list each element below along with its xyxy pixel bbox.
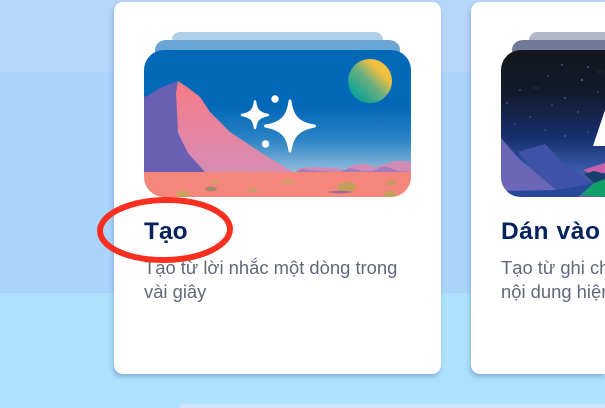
icon: white letter fragment — [593, 110, 605, 146]
heading: Dán vào: Dán vào — [501, 218, 601, 244]
bottom panel edge — [180, 404, 605, 408]
text: create description — [144, 257, 397, 302]
icon: stacked illustration of desert landscape with sparkles — [144, 32, 411, 197]
panel: create card — [114, 2, 441, 374]
text: create description: Tạo từ lời nhắc một dòng trong — [144, 257, 397, 278]
text: paste description — [501, 257, 605, 302]
panel: paste card — [471, 2, 605, 374]
text: create description: vài giây — [144, 281, 206, 302]
icon: sparkles — [242, 95, 314, 151]
icon: stacked illustration of night landscape — [501, 32, 605, 197]
heading: Tạo: Tạo — [144, 218, 188, 244]
